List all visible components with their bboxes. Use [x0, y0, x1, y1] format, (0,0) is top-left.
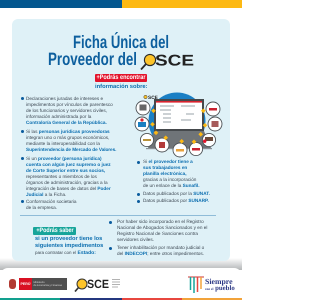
- logo: Perú ministerio: [19, 278, 67, 290]
- bullet 3: órganos de administración, gracias a la: [26, 180, 108, 185]
- bullet 4: [21, 199, 77, 210]
- bullet 1: Declaraciones juradas de intereses e: [26, 96, 103, 101]
- bullet 8: Registro Nacional de Sanciones contra: [117, 231, 198, 236]
- bullet 3: cuenta con algún juez supremo o juez: [26, 162, 111, 167]
- bullet 5: Si el proveedor tiene a: [143, 159, 193, 164]
- logo: escudo Perú: [8, 279, 16, 289]
- heading: podrás encontrar: +Podrás encontrar: [96, 74, 146, 81]
- logo: OSCE: [74, 277, 120, 292]
- bullet 3: [21, 156, 111, 196]
- bullet 9: Tener inhabilitación por mandato judicial o: [117, 245, 204, 250]
- bullet 7: Datos publicados por SUNARP.: [143, 198, 209, 203]
- subheading: impedimentos: si un proveedor tiene los: [35, 236, 102, 242]
- divider: [20, 214, 216, 216]
- right list: [137, 159, 210, 203]
- bullet 2: integran uno o más grupos económicos,: [26, 135, 109, 140]
- bullet 1: impedimentos por vínculos de parentesco: [26, 102, 113, 107]
- bullet 1: información administrada por la: [26, 114, 91, 119]
- bullet 2: mediante la interoperabilidad con la: [26, 141, 100, 146]
- bullet 8: Por haber sido incorporado en el Registro: [117, 219, 204, 224]
- label: podrás saber: +Podrás saber: [36, 226, 73, 234]
- title: [48, 32, 194, 70]
- laptop illustration: [134, 92, 222, 158]
- subheading: impedimentos: [35, 236, 104, 256]
- bullet 8: [109, 219, 208, 242]
- logo: Perú ministerio: Ministerio: [34, 280, 45, 284]
- bullet 9: [109, 245, 204, 256]
- title: SCE: [155, 52, 194, 70]
- bullet 8: Nacional de Abogados Sancionados y en el: [117, 225, 207, 230]
- title: Ficha Única del: [73, 32, 169, 52]
- bullet 1: [21, 96, 113, 125]
- main panel: [12, 19, 230, 261]
- footer shadow band: [0, 258, 242, 270]
- left list: [21, 96, 116, 210]
- logo: Perú ministerio: PERÚ: [20, 282, 30, 286]
- subheading: información sobre: información sobre:: [95, 84, 148, 90]
- bullet 2: Si las personas jurídicas proveedoras: [26, 129, 110, 134]
- bullet 2: Superintendencia de Mercado de Valores.: [26, 147, 116, 152]
- bullet 4: de la empresa.: [26, 205, 57, 210]
- top colour bar: [0, 0, 242, 8]
- logo: Perú ministerio: de Economía y Finanzas: [34, 284, 62, 287]
- subheading: impedimentos: siguientes impedimentos: [35, 242, 103, 248]
- bullet 9: del INDECOPI; entre otros impedimentos.: [117, 251, 204, 256]
- bottom list: [109, 219, 208, 256]
- bullet 3: de Corte Superior entre sus socios,: [26, 168, 105, 172]
- subheading: impedimentos: para contratar con el Estado:: [35, 250, 96, 256]
- bullet 5: sus trabajadores en: [143, 165, 187, 170]
- bullet 5: planilla electrónica,: [143, 171, 187, 176]
- bullet 8: servidores civiles.: [117, 237, 154, 242]
- title: Proveedor del: [48, 49, 137, 69]
- bullet 1: Contraloría General de la República.: [26, 120, 107, 125]
- bullet 5: de un enlace de la Sunafil.: [143, 183, 200, 188]
- laptop illustration: SCE: [148, 95, 159, 101]
- bullet 3: Judicial a la Ficha.: [26, 192, 66, 196]
- bullet 3: Si un proveedor (persona jurídica): [26, 156, 102, 161]
- bottom colour bar: [0, 298, 242, 300]
- bullet 5: gracias a la incorporación: [143, 177, 196, 182]
- bullet 4: Conformación societaria: [26, 199, 77, 204]
- bullet 6: Datos publicados por la SUNAT.: [143, 191, 210, 196]
- bullet 2: [21, 129, 116, 152]
- bullet 1: de los funcionarios y servidores civiles,: [26, 108, 107, 112]
- footer: [0, 268, 242, 298]
- logo: Siempre con el pueblo: [188, 276, 235, 293]
- bullet 3: representantes o miembros de los: [26, 174, 97, 179]
- bullet 5: [137, 159, 200, 188]
- bullet 3: integración de bases de datos del Poder: [26, 186, 111, 191]
- logo: Siempre con el pueblo: Siempre: [205, 276, 233, 286]
- logo: OSCE: SCE: [87, 277, 109, 291]
- logo: Siempre con el pueblo: con el pueblo: [205, 284, 235, 292]
